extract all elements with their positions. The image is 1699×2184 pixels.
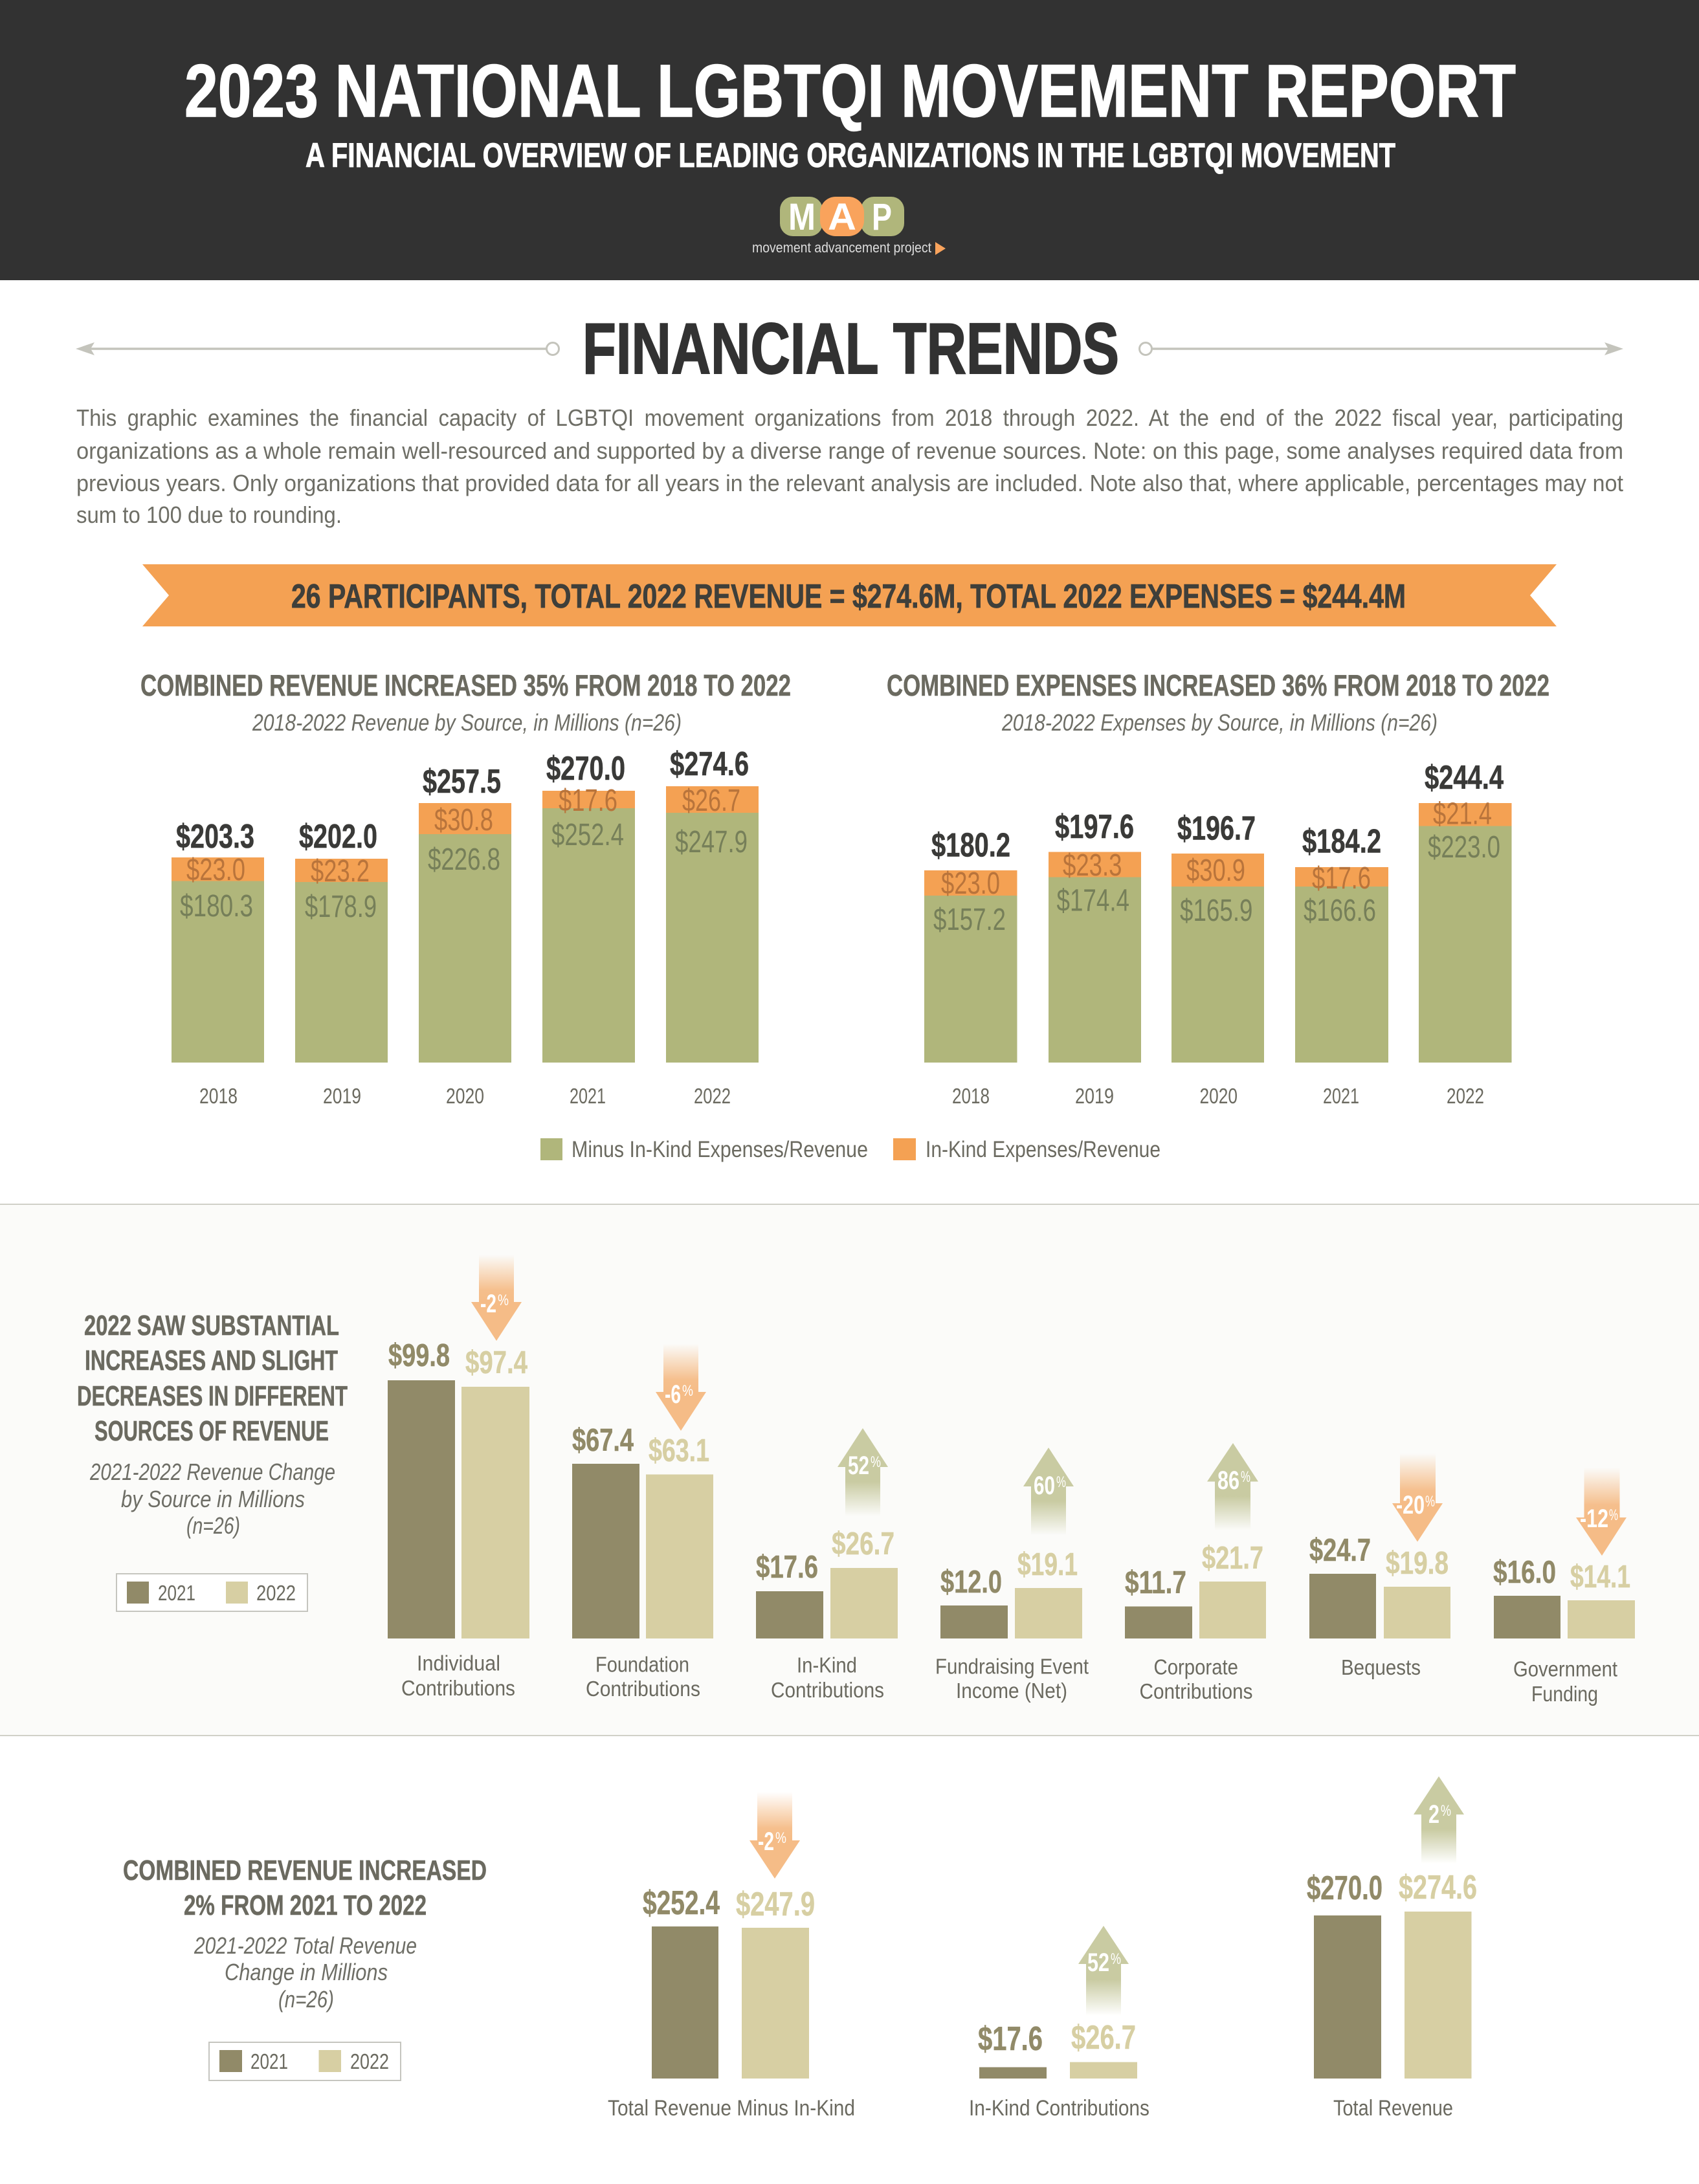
bars: in-kind contributions: Contributions xyxy=(771,1678,884,1702)
arrow: 2% total revenue: % xyxy=(1441,1802,1451,1820)
bars: bequests: Bequests xyxy=(1341,1655,1421,1679)
bars: total revenue minus in-kind: Total Revenue Minus In-Kind xyxy=(608,2096,855,2121)
section subheading: by Source in Millions xyxy=(121,1486,305,1512)
section subheading: (n=26) xyxy=(278,1986,334,2013)
legend: revenue and expenses xyxy=(540,1137,1160,1162)
bars: in-kind contributions xyxy=(756,1527,898,1702)
bars: in-kind contributions: $17.6 xyxy=(978,2020,1043,2058)
bar: expenses 2018: $180.2 xyxy=(931,827,1010,865)
legend: 2021 and 2022: 2022 xyxy=(256,1581,296,1605)
bars: in-kind contributions: $17.6 xyxy=(756,1550,818,1585)
bars: in-kind contributions: $26.7 xyxy=(1071,2019,1136,2057)
logo: MAP: movement advancement project xyxy=(752,239,931,256)
section heading: sources of revenue: INCREASES AND SLIGHT xyxy=(85,1345,338,1376)
arrow: 52% in-kind: % xyxy=(871,1453,881,1471)
chart subheading: revenue: 2018-2022 Revenue by Source, in Millions (n=26) xyxy=(252,709,682,736)
bar: expenses 2019: $174.4 xyxy=(1056,884,1129,918)
section subheading: Change in Millions xyxy=(225,1959,388,1985)
bar: expenses 2019: $23.3 xyxy=(1063,848,1122,883)
bar: revenue 2020 xyxy=(419,763,511,1108)
bars: total revenue xyxy=(1307,1869,1477,2121)
bar: revenue 2021 xyxy=(542,750,635,1108)
bars: total revenue: $270.0 xyxy=(1307,1870,1383,1907)
logo: MAP: P xyxy=(872,196,892,238)
arrow: -2% individual: % xyxy=(498,1292,509,1309)
bars: government funding: Government xyxy=(1513,1657,1617,1681)
bar: expenses 2022: $244.4 xyxy=(1425,759,1504,797)
bar: revenue 2019: $178.9 xyxy=(305,890,377,924)
bar: revenue 2021: $270.0 xyxy=(546,750,625,788)
bars: total revenue minus in-kind xyxy=(608,1884,855,2121)
logo: MAP xyxy=(752,196,946,256)
arrow: right ornament xyxy=(1139,342,1623,355)
bar: expenses 2020: 2020 xyxy=(1200,1084,1238,1108)
arrow: 60% fundraising xyxy=(1023,1448,1074,1535)
bar: expenses 2020: $196.7 xyxy=(1177,810,1256,848)
bar: expenses 2022: $21.4 xyxy=(1433,797,1492,832)
bar: expenses 2021: $17.6 xyxy=(1312,861,1371,896)
intro paragraph: sum to 100 due to rounding. xyxy=(76,502,342,528)
arrow: 86% corporate: % xyxy=(1241,1468,1250,1486)
section heading: sources of revenue xyxy=(77,1310,348,1447)
bar: expenses 2019: $197.6 xyxy=(1055,808,1134,846)
bar: expenses 2019 xyxy=(1049,808,1141,1108)
bar: revenue 2022: $247.9 xyxy=(675,825,748,859)
bar: revenue 2019: 2019 xyxy=(323,1084,361,1108)
panel: revenue change by source xyxy=(0,1204,1699,1736)
legend: revenue and expenses: Minus In-Kind Expenses/Revenue xyxy=(572,1137,868,1162)
bars: in-kind contributions: In-Kind Contributions xyxy=(969,2096,1149,2121)
section subheading: 2021-2022 Revenue Change xyxy=(89,1459,335,1485)
arrow: -2% individual xyxy=(471,1255,522,1341)
logo: MAP: M xyxy=(788,196,816,238)
bar: revenue 2019 xyxy=(295,818,388,1108)
section subheading: (n=26) xyxy=(186,1512,240,1539)
arrow: -2% total minus in-kind: -2 xyxy=(758,1827,774,1856)
arrow: 52% in-kind: 52 xyxy=(848,1451,869,1480)
bars: corporate contributions: $11.7 xyxy=(1125,1565,1186,1600)
panel: expenses chart xyxy=(887,668,1549,1108)
bars: fundraising event income: Income (Net) xyxy=(956,1679,1067,1703)
section heading: sources of revenue: 2022 SAW SUBSTANTIAL xyxy=(84,1310,339,1341)
bars: foundation contributions: $63.1 xyxy=(649,1433,709,1468)
legend: 2021 and 2022 xyxy=(117,1574,307,1611)
bars: government funding: $14.1 xyxy=(1570,1560,1630,1594)
chart subheading: expenses: 2018-2022 Expenses by Source, in Millions (n=26) xyxy=(1001,709,1438,736)
bar: expenses 2020 xyxy=(1172,810,1264,1108)
intro paragraph xyxy=(76,404,1623,528)
bars: government funding: Funding xyxy=(1531,1682,1598,1706)
bars: fundraising event income xyxy=(935,1547,1089,1703)
bars: corporate contributions: Contributions xyxy=(1139,1679,1253,1703)
bar: expenses 2022: 2022 xyxy=(1447,1084,1484,1108)
bar: expenses 2019: 2019 xyxy=(1075,1084,1114,1108)
bar: expenses 2022 xyxy=(1419,759,1512,1108)
bar: expenses 2020: $30.9 xyxy=(1186,854,1245,888)
arrow: 2% total revenue xyxy=(1414,1776,1464,1864)
bar: expenses 2018: 2018 xyxy=(952,1084,990,1108)
header band xyxy=(0,0,1699,280)
arrow: -20% bequests: -20 xyxy=(1396,1491,1425,1519)
section subheading xyxy=(194,1932,417,2013)
arrow: -6% foundation: -6 xyxy=(665,1380,681,1409)
bars: total revenue: $274.6 xyxy=(1399,1869,1477,1906)
arrow: left ornament xyxy=(76,342,559,355)
arrow: -20% bequests xyxy=(1392,1453,1443,1541)
bar: revenue 2019: $202.0 xyxy=(299,818,377,855)
arrow: -12% government xyxy=(1576,1468,1627,1556)
legend: 2021 and 2022: 2022 xyxy=(350,2049,389,2073)
section heading: combined revenue: 2% FROM 2021 TO 2022 xyxy=(184,1890,427,1921)
bar: expenses 2018: $23.0 xyxy=(941,866,1000,901)
intro paragraph: organizations as a whole remain well-resourced and supported by a diverse range of revenue sources. Note: on this page, some analyses required data from xyxy=(76,437,1623,464)
bar: revenue 2018: 2018 xyxy=(199,1084,238,1108)
bar: revenue 2020: 2020 xyxy=(446,1084,484,1108)
bar: expenses 2021 xyxy=(1295,823,1388,1108)
section heading: sources of revenue: SOURCES OF REVENUE xyxy=(94,1415,329,1447)
section subheading xyxy=(89,1459,335,1539)
bars: in-kind contributions xyxy=(969,2019,1149,2121)
section heading: sources of revenue: DECREASES IN DIFFERENT xyxy=(77,1380,348,1412)
bars: foundation contributions: $67.4 xyxy=(572,1423,634,1458)
arrow: 86% corporate xyxy=(1207,1443,1258,1530)
bars: fundraising event income: Fundraising Event xyxy=(935,1654,1089,1679)
bars: individual contributions: $97.4 xyxy=(465,1345,527,1380)
legend: 2021 and 2022: 2021 xyxy=(250,2049,288,2073)
bar: revenue 2019: $23.2 xyxy=(311,854,370,888)
bars: bequests: $19.8 xyxy=(1386,1546,1449,1581)
bars: bequests xyxy=(1309,1533,1450,1679)
bar: revenue 2018: $23.0 xyxy=(186,853,245,887)
arrow: 52% in-kind total xyxy=(1078,1926,1129,2016)
arrow: 52% in-kind total: % xyxy=(1111,1950,1121,1968)
bars: individual contributions xyxy=(388,1338,529,1700)
bar: expenses 2020: $165.9 xyxy=(1180,894,1253,928)
arrow: -2% total minus in-kind xyxy=(750,1792,800,1879)
bar: revenue 2021: $252.4 xyxy=(551,818,624,852)
banner xyxy=(142,564,1557,626)
bars: fundraising event income: $19.1 xyxy=(1017,1547,1078,1582)
arrow: 52% in-kind total: 52 xyxy=(1087,1948,1109,1977)
bar: revenue 2022: $274.6 xyxy=(670,745,749,783)
arrow: -6% foundation: % xyxy=(682,1382,693,1400)
bar: expenses 2021: 2021 xyxy=(1323,1084,1359,1108)
bars: foundation contributions: Contributions xyxy=(586,1677,700,1701)
bars: individual contributions: $99.8 xyxy=(388,1338,450,1373)
bars: foundation contributions: Foundation xyxy=(595,1653,689,1676)
bars: individual contributions: Contributions xyxy=(401,1676,515,1700)
arrow: -12% government: % xyxy=(1609,1506,1618,1524)
subtitle: A FINANCIAL OVERVIEW OF LEADING ORGANIZATIONS IN THE LGBTQI MOVEMENT xyxy=(305,137,1395,175)
bar: revenue 2020: $226.8 xyxy=(428,843,500,877)
chart heading: revenue: COMBINED REVENUE INCREASED 35% FROM 2018 TO 2022 xyxy=(140,668,791,702)
legend: 2021 and 2022 xyxy=(209,2042,401,2080)
bar: expenses 2021: $166.6 xyxy=(1304,894,1376,928)
bars: total revenue minus in-kind: $252.4 xyxy=(643,1884,720,1922)
arrow: 86% corporate: 86 xyxy=(1217,1466,1239,1495)
section heading: combined revenue: COMBINED REVENUE INCREASED xyxy=(123,1855,487,1886)
arrow: -2% individual: -2 xyxy=(480,1290,496,1318)
bar: expenses 2022: $223.0 xyxy=(1428,830,1500,865)
arrow: 52% in-kind xyxy=(838,1428,888,1516)
bar: revenue 2022 xyxy=(666,745,759,1108)
bars: individual contributions: Individual xyxy=(417,1651,500,1675)
bars: total revenue minus in-kind: $247.9 xyxy=(736,1886,815,1923)
bars: in-kind contributions: In-Kind xyxy=(797,1653,857,1677)
bar: expenses 2018: $157.2 xyxy=(933,903,1006,937)
bars: corporate contributions: $21.7 xyxy=(1202,1541,1263,1576)
bar: revenue 2021: 2021 xyxy=(570,1084,606,1108)
bar: revenue 2021: $17.6 xyxy=(559,784,617,818)
bars: government funding: $16.0 xyxy=(1493,1555,1556,1590)
bar: revenue 2018: $180.3 xyxy=(180,889,253,923)
section heading: combined revenue xyxy=(123,1855,487,1921)
arrow: 2% total revenue: 2 xyxy=(1428,1800,1439,1829)
arrow: 60% fundraising: 60 xyxy=(1034,1472,1055,1500)
bars: government funding xyxy=(1493,1555,1635,1706)
arrow: -20% bequests: % xyxy=(1425,1493,1435,1510)
bars: total revenue: Total Revenue xyxy=(1333,2096,1453,2121)
bars: corporate contributions: Corporate xyxy=(1153,1655,1238,1679)
panel: total revenue change xyxy=(123,1776,1477,2121)
bar: revenue 2020: $30.8 xyxy=(434,803,493,837)
bar: revenue 2018: $203.3 xyxy=(176,818,254,855)
panel: revenue chart xyxy=(140,668,791,1108)
bar: expenses 2018 xyxy=(924,827,1017,1108)
bar: revenue 2022: $26.7 xyxy=(682,784,740,818)
banner: 26 PARTICIPANTS, TOTAL 2022 REVENUE = $274.6M, TOTAL 2022 EXPENSES = $244.4M xyxy=(291,578,1406,615)
arrow: -2% total minus in-kind: % xyxy=(775,1829,786,1847)
bar: revenue 2020: $257.5 xyxy=(423,763,501,800)
bars: fundraising event income: $12.0 xyxy=(940,1565,1002,1600)
bars: bequests: $24.7 xyxy=(1309,1533,1371,1568)
legend: 2021 and 2022: 2021 xyxy=(158,1581,195,1605)
bars: in-kind contributions: $26.7 xyxy=(832,1527,894,1561)
intro paragraph: previous years. Only organizations that provided data for all years in the relevant analysis are included. Note also that, where applicable, percentages may not xyxy=(76,470,1623,496)
bar: revenue 2022: 2022 xyxy=(694,1084,731,1108)
logo: MAP: A xyxy=(828,196,856,238)
bars: corporate contributions xyxy=(1125,1541,1266,1703)
heading: financial trends: FINANCIAL TRENDS xyxy=(583,309,1119,389)
bars: foundation contributions xyxy=(572,1423,713,1701)
legend: revenue and expenses: In-Kind Expenses/Revenue xyxy=(926,1137,1160,1162)
bar: expenses 2021: $184.2 xyxy=(1302,823,1381,861)
arrow: -6% foundation xyxy=(656,1343,706,1431)
bar: revenue 2018 xyxy=(172,818,264,1108)
arrow: -12% government: -12 xyxy=(1580,1505,1608,1533)
section subheading: 2021-2022 Total Revenue xyxy=(194,1932,417,1959)
arrow: 60% fundraising: % xyxy=(1056,1473,1066,1491)
